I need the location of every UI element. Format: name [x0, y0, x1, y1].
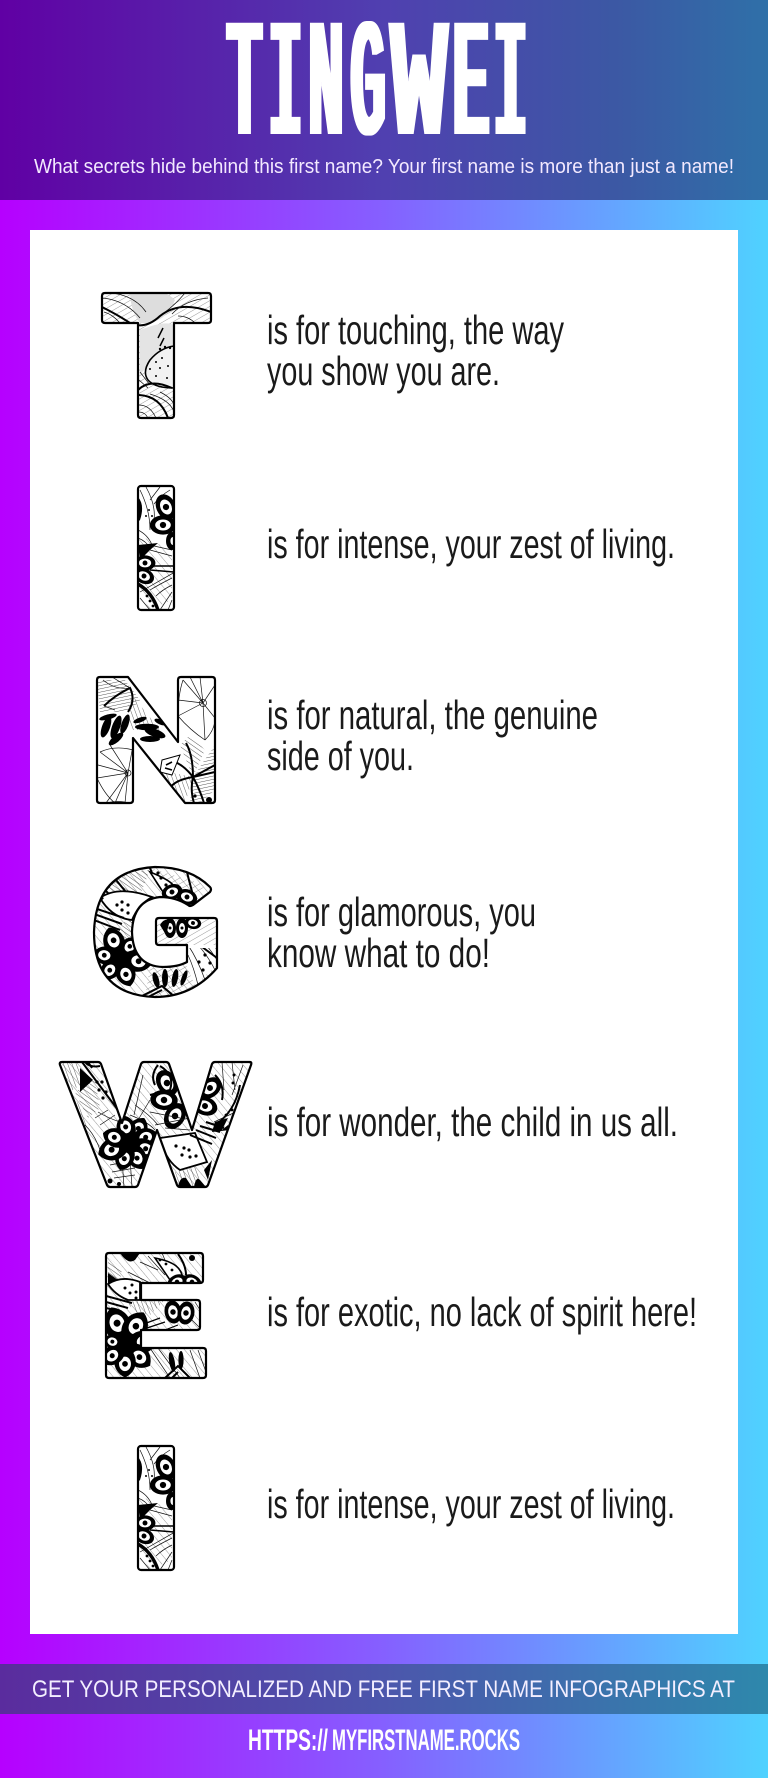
text: N meaning: [267, 692, 598, 779]
subtitle: What secrets hide behind this first name? Your first name is more than just a name!: [34, 156, 734, 178]
text: T meaning: you show you are.: [267, 348, 500, 394]
text: N meaning: is for natural, the genuine: [267, 692, 598, 738]
footer url: HTTPS://: [248, 1724, 328, 1757]
icon: doodle letter I (second): [136, 1444, 176, 1572]
icon: doodle letter I: [136, 484, 176, 612]
icon: doodle letter E: [97, 1251, 208, 1380]
white content panel: [30, 230, 738, 1634]
icon: doodle letter W: [58, 1060, 254, 1190]
icon: doodle letter G: [91, 865, 219, 999]
header band: [0, 0, 768, 200]
footer band: [0, 1664, 768, 1714]
icon: doodle letter T: [100, 289, 215, 420]
footer url: MYFIRSTNAME.ROCKS: [332, 1724, 520, 1757]
text: T meaning: [267, 307, 564, 394]
text: G meaning: know what to do!: [267, 930, 490, 976]
icon: doodle letter N: [95, 675, 217, 805]
title: [226, 0, 528, 188]
text: N meaning: side of you.: [267, 733, 414, 779]
text: G meaning: [267, 889, 536, 976]
text: T meaning: is for touching, the way: [267, 307, 564, 353]
text: G meaning: is for glamorous, you: [267, 889, 536, 935]
